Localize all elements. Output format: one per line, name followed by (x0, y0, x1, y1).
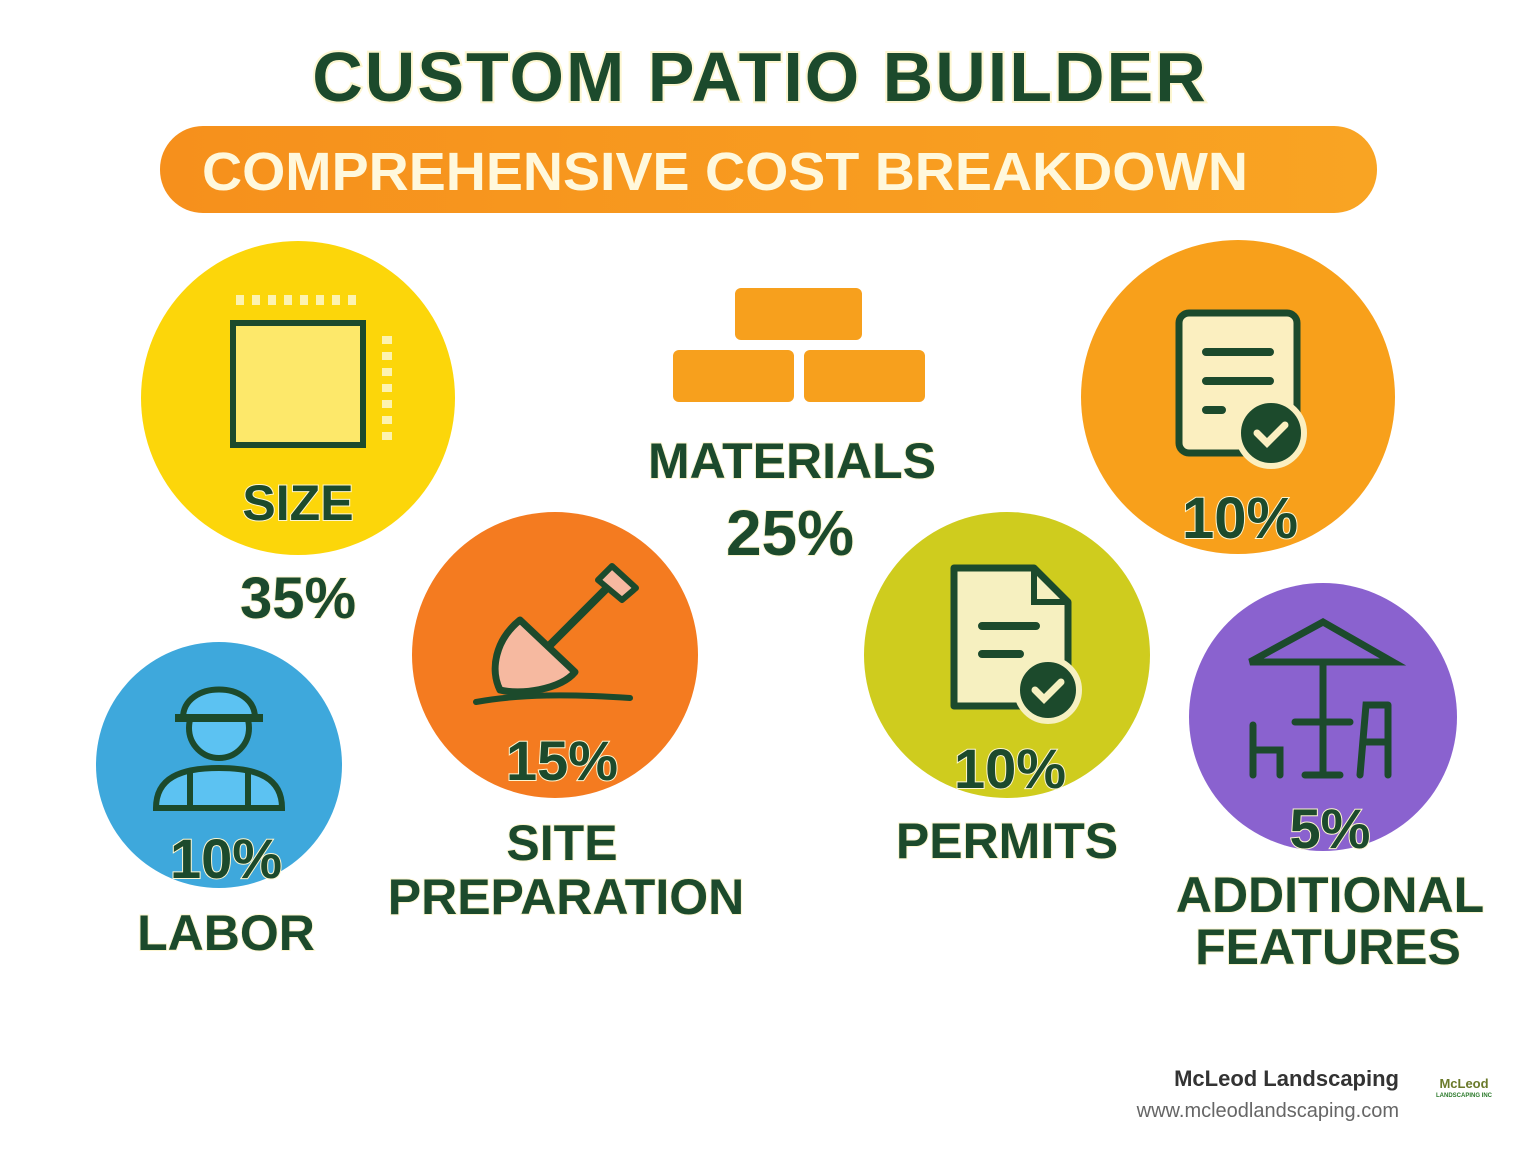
logo (1436, 1076, 1493, 1099)
panel: site preparation: 15% (506, 729, 618, 792)
panel: permits (864, 512, 1150, 869)
subtitle banner (160, 126, 1377, 213)
icon: permit document (954, 568, 1079, 721)
panel: additional features: FEATURES (1195, 919, 1461, 975)
logo: LANDSCAPING INC (1436, 1093, 1493, 1099)
title: CUSTOM PATIO BUILDER (312, 38, 1208, 116)
panel: size: 35% (240, 566, 356, 631)
panel: top right document: 10% (1182, 486, 1298, 551)
footer: company name: McLeod Landscaping (1174, 1066, 1399, 1091)
panel: materials: 25% (726, 497, 854, 569)
panel: top right document (1081, 240, 1395, 554)
icon: checked document (1179, 313, 1304, 466)
subtitle banner: COMPREHENSIVE COST BREAKDOWN (202, 142, 1248, 202)
icon: shovel (476, 566, 636, 702)
footer: website: www.mcleodlandscaping.com (1136, 1100, 1399, 1122)
panel: materials: MATERIALS (648, 433, 936, 489)
panel: site preparation: SITE (506, 815, 618, 871)
panel: additional features: ADDITIONAL (1176, 867, 1484, 923)
icon: square area (233, 300, 387, 445)
panel: labor: 10% (170, 827, 282, 890)
panel: materials (648, 288, 936, 569)
panel: additional features: 5% (1290, 797, 1370, 860)
panel: additional features (1176, 583, 1484, 975)
panel: permits: 10% (954, 737, 1066, 800)
panel: size (141, 241, 455, 631)
panel: site preparation: PREPARATION (388, 869, 744, 925)
icon: worker (156, 690, 282, 808)
panel: size: SIZE (242, 475, 354, 531)
icon: bricks (673, 288, 925, 402)
logo: McLeod (1439, 1076, 1489, 1091)
panel: labor: LABOR (137, 905, 315, 961)
panel: permits: PERMITS (896, 813, 1118, 869)
panel: site preparation (388, 512, 744, 925)
icon: patio umbrella table (1250, 622, 1393, 775)
panel: labor (96, 642, 342, 961)
